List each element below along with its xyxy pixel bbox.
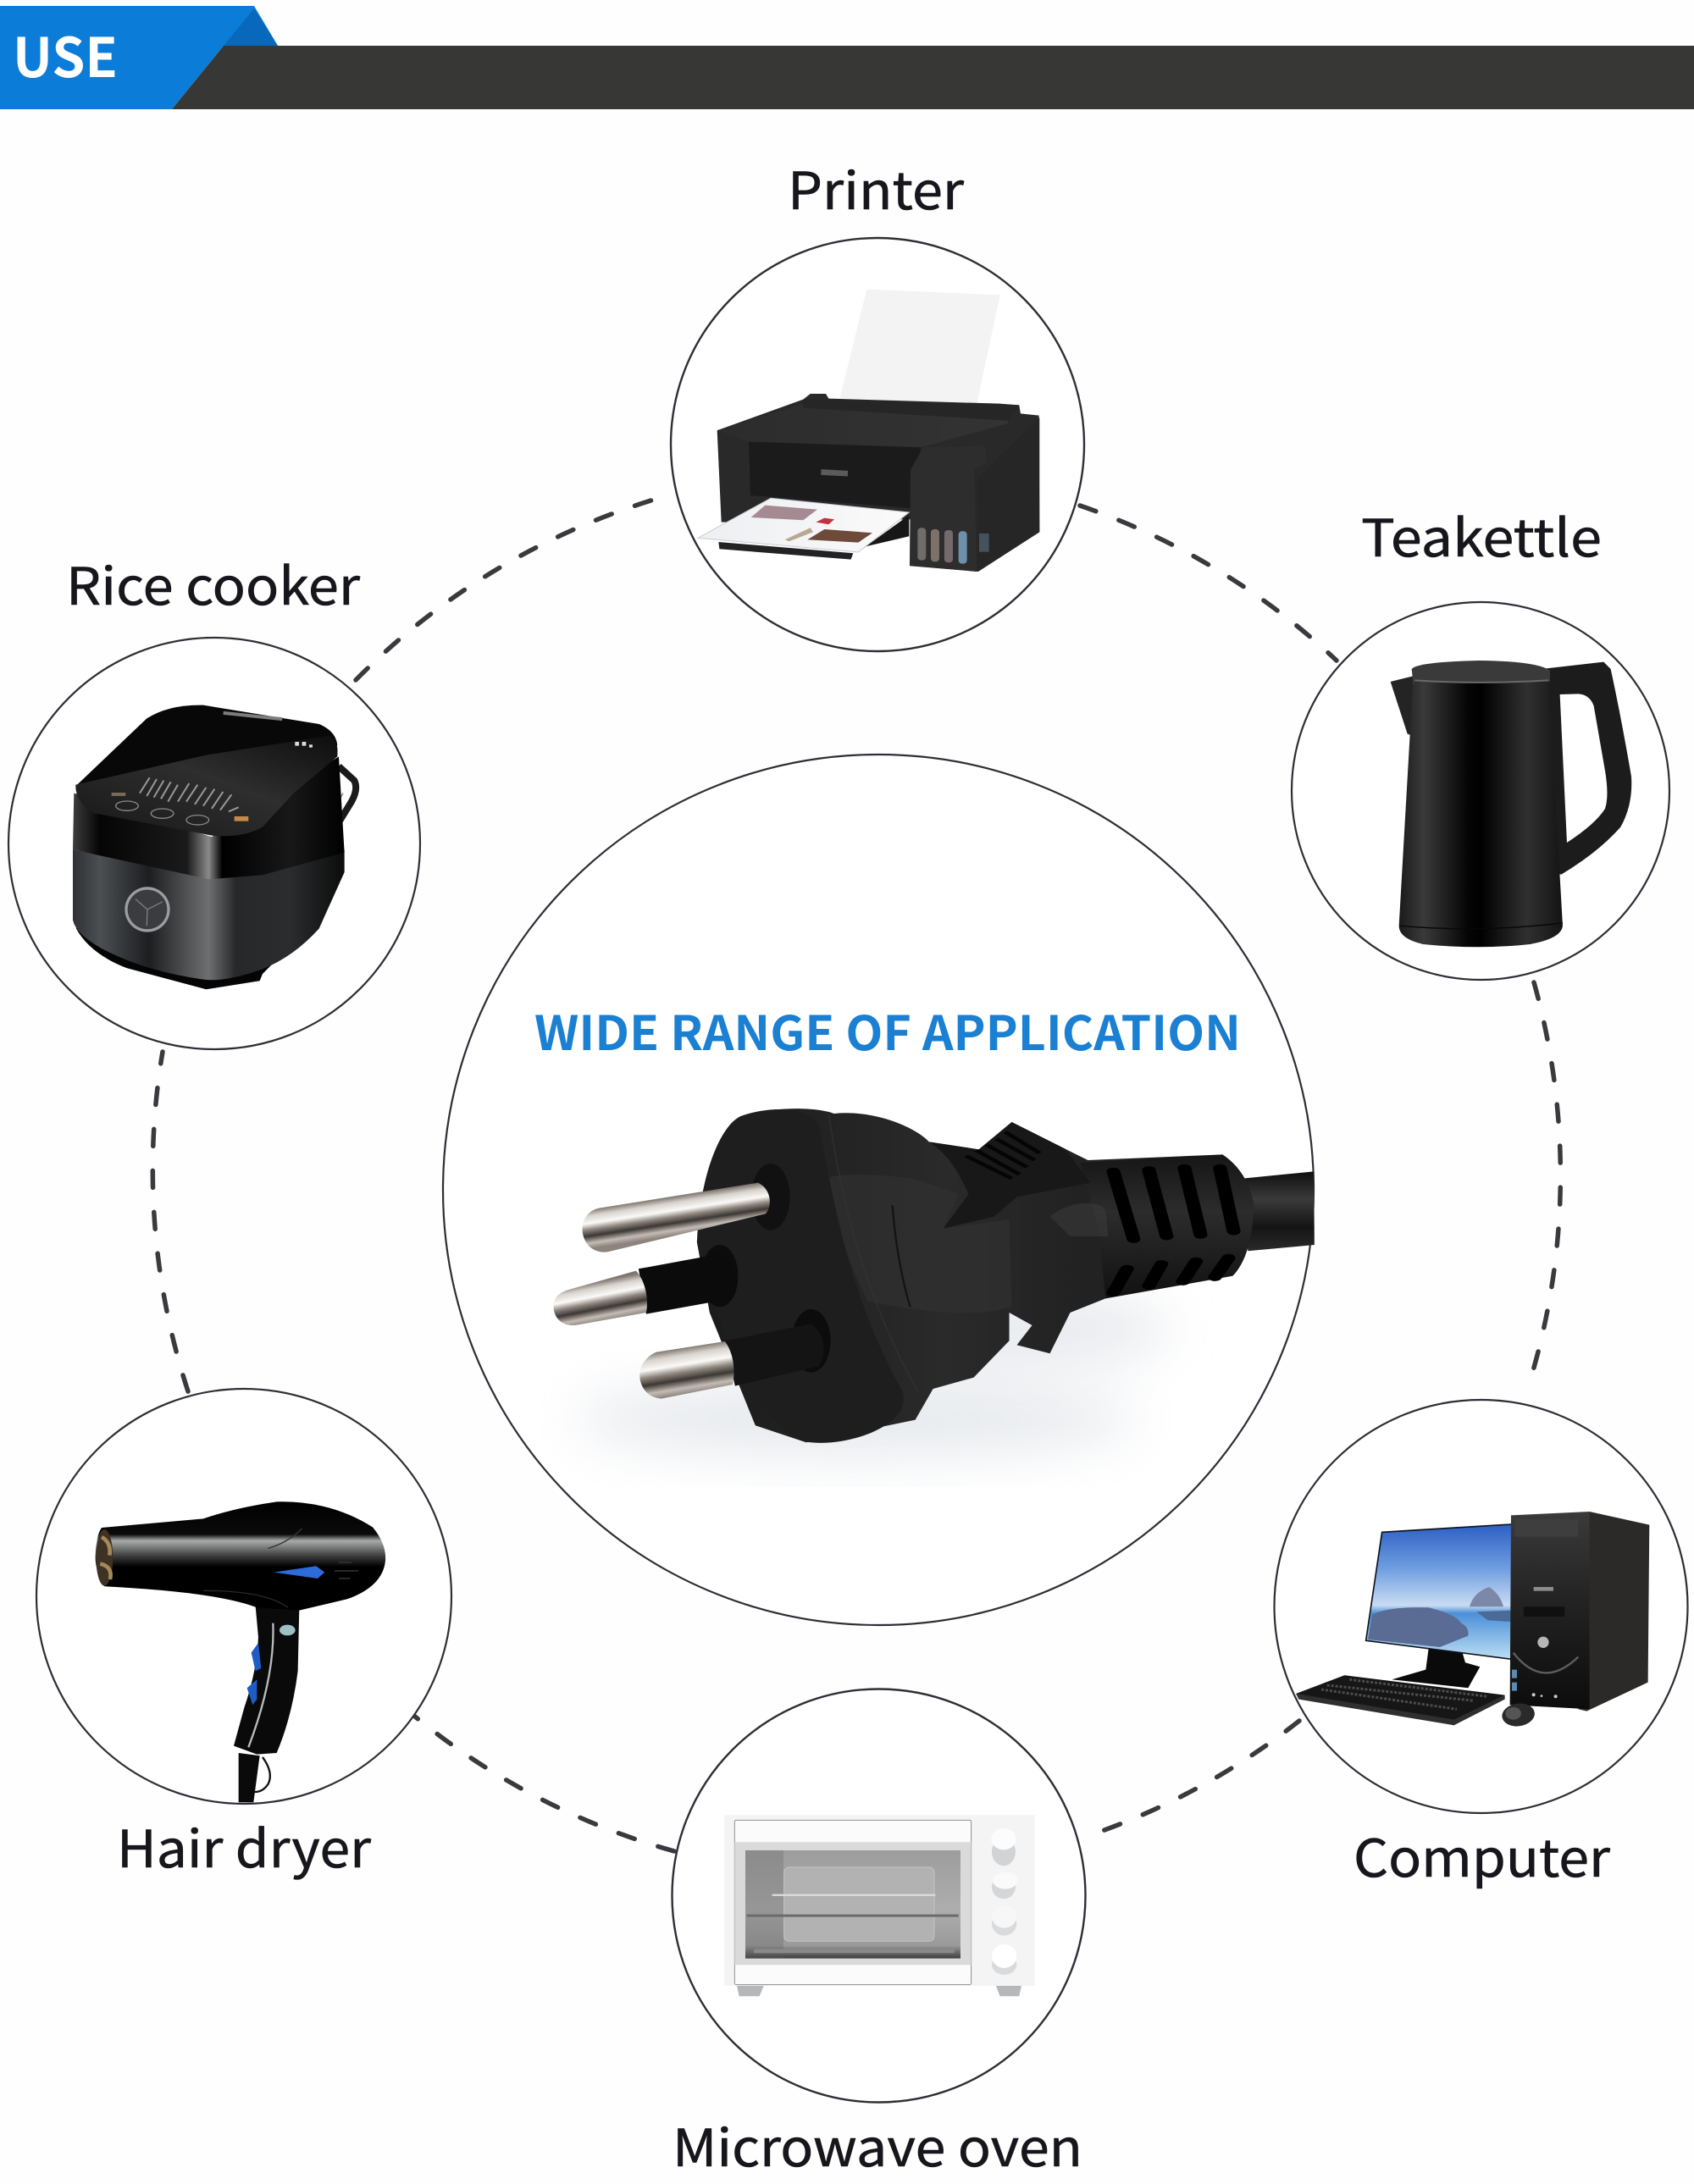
front recess <box>749 442 921 508</box>
icon: kettle <box>1391 661 1631 947</box>
icon: rice cooker <box>73 705 356 989</box>
dryer barrel <box>96 1501 385 1611</box>
kettle handle <box>1542 662 1631 875</box>
tower front <box>1510 1512 1590 1709</box>
nozzle <box>96 1529 113 1586</box>
handle <box>234 1606 299 1755</box>
printed photos <box>751 506 817 520</box>
drive bays <box>1514 1519 1578 1537</box>
handle badge <box>280 1625 296 1635</box>
icon: white oven <box>724 1815 1035 1996</box>
plug drop shadow <box>576 1287 1169 1457</box>
tab fold <box>224 8 278 46</box>
printed sheet <box>698 498 909 552</box>
blue accent <box>274 1566 324 1579</box>
panel: printer <box>671 238 1084 651</box>
side handle <box>315 766 356 849</box>
teakettle circle <box>1292 602 1669 980</box>
paper feed sheet <box>840 290 1000 404</box>
image: three-pin plug <box>554 1109 1315 1443</box>
oven circle <box>673 1689 1086 2102</box>
icon: hair dryer <box>96 1501 385 1802</box>
kettle body <box>1399 680 1563 947</box>
monitor stand <box>1392 1649 1480 1688</box>
printer body <box>717 394 1039 572</box>
vents <box>335 1562 358 1579</box>
usb ports <box>1512 1670 1558 1698</box>
strain relief slots <box>1113 1168 1234 1293</box>
power button <box>1537 1637 1549 1648</box>
ink tank block <box>910 446 987 572</box>
keyboard <box>1296 1675 1505 1725</box>
orange indicator <box>235 816 248 821</box>
mouse <box>1501 1701 1536 1728</box>
control knobs <box>991 1828 1017 1975</box>
dark bar <box>172 46 1694 109</box>
lid rim highlight <box>1414 680 1548 683</box>
control panel top <box>75 735 338 836</box>
panel: rice cooker <box>8 638 420 1049</box>
pin 3 <box>639 1324 824 1399</box>
front dial <box>125 887 170 932</box>
panel: central plug circle <box>443 755 1315 1625</box>
panel buttons <box>116 801 209 825</box>
header banner <box>0 6 1694 109</box>
printer top <box>717 404 1008 447</box>
rice cooker circle <box>8 638 420 1049</box>
panel: hair dryer <box>36 1389 451 1804</box>
door frame <box>734 1820 972 1985</box>
panel: microwave oven <box>673 1689 1086 2102</box>
disc edge highlight <box>829 1115 918 1391</box>
label: teakettle: Teakettle <box>1361 496 1602 572</box>
door glass edge <box>734 1842 972 1965</box>
plug face disc <box>697 1109 904 1443</box>
title: wide range of application: WIDE RANGE OF APPLICATION <box>534 996 1241 1064</box>
back wall <box>784 1867 934 1941</box>
blue switches <box>247 1643 261 1705</box>
oven feet <box>737 1986 764 1996</box>
racks <box>745 1850 959 1959</box>
screen rocks <box>1368 1607 1469 1647</box>
screen island <box>1470 1587 1503 1606</box>
output tray <box>718 542 853 560</box>
panel: teakettle <box>1292 602 1669 980</box>
monitor screen <box>1366 1524 1512 1659</box>
upper gloss band <box>73 756 345 879</box>
brand mark <box>821 469 848 476</box>
back lid <box>75 705 337 786</box>
printer circle <box>671 238 1084 651</box>
collar shadow <box>929 1122 1090 1229</box>
heading: USE: USE <box>13 15 118 93</box>
tower side <box>1578 1512 1649 1711</box>
icon: desktop computer <box>1296 1512 1649 1728</box>
kettle lid <box>1412 661 1550 682</box>
ink windows <box>917 528 989 564</box>
label: hair dryer: Hair dryer <box>117 1807 371 1883</box>
handle stripe <box>248 1623 274 1747</box>
dashed ring connecting appliances <box>152 497 1560 1851</box>
computer circle <box>1274 1400 1687 1813</box>
blue tab <box>0 6 278 109</box>
oven body <box>724 1815 1035 1986</box>
rating marks <box>295 742 313 748</box>
barrel seam <box>268 1529 302 1548</box>
pin 2 <box>554 1254 737 1325</box>
central circle outline <box>443 755 1314 1625</box>
power cord <box>239 1753 260 1802</box>
label: microwave oven: Microwave oven <box>673 2106 1082 2181</box>
label: rice cooker: Rice cooker <box>66 545 360 620</box>
lower body <box>73 849 345 980</box>
socket recesses <box>751 1164 790 1230</box>
label: printer: Printer <box>788 149 964 224</box>
feeder cover <box>803 400 1019 421</box>
display markings <box>140 777 239 811</box>
textured mid band <box>829 1175 1012 1313</box>
cooker base shadow <box>76 870 345 989</box>
grip ridges <box>966 1132 1040 1179</box>
strain relief <box>1080 1154 1254 1298</box>
panel: computer <box>1274 1400 1687 1813</box>
plug main body <box>697 1109 1254 1442</box>
hair dryer circle <box>36 1389 451 1804</box>
kettle spout <box>1391 676 1413 735</box>
brand text block <box>1534 1587 1553 1591</box>
front curve <box>1514 1653 1578 1673</box>
oven cavity <box>745 1850 960 1959</box>
cable <box>1243 1171 1315 1251</box>
label: computer: Computer <box>1354 1816 1610 1892</box>
body base seam <box>1400 923 1563 929</box>
icon: printer <box>698 290 1039 572</box>
pin 1 <box>583 1183 770 1252</box>
